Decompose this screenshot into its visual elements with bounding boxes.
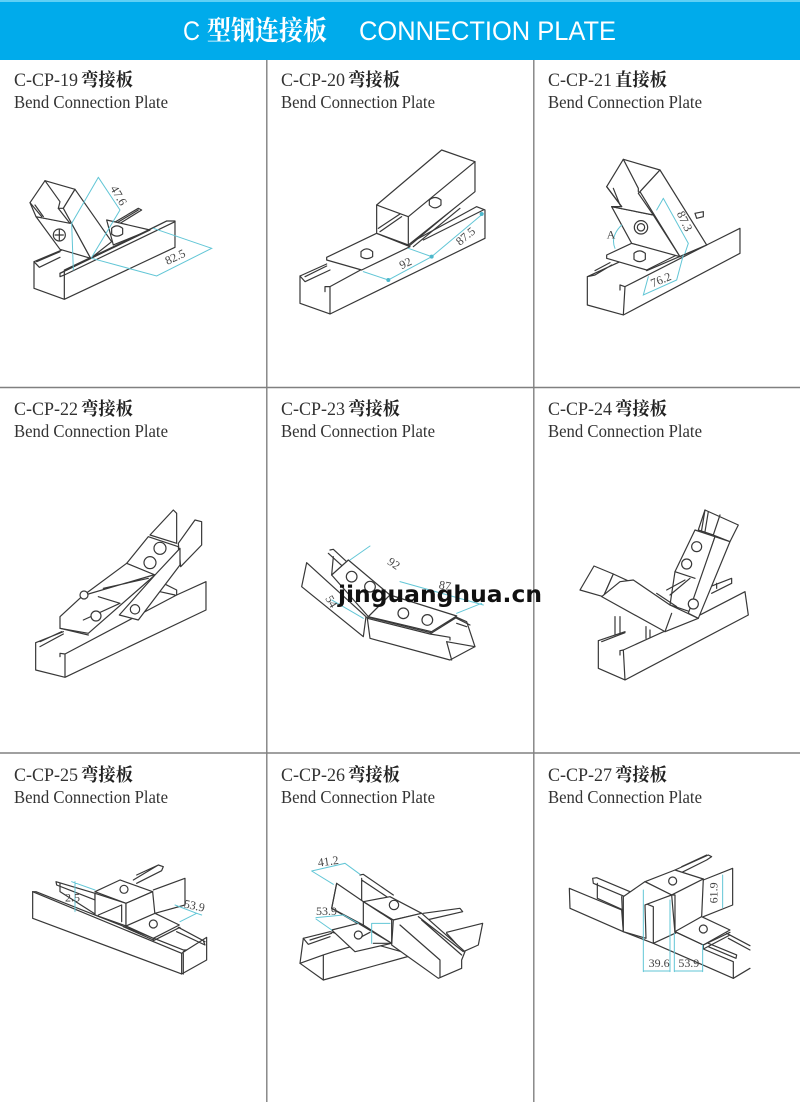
- diagram: C-CP-23: 54: [322, 593, 341, 610]
- panel: C-CP-22 label: C-CP-22: [14, 399, 78, 420]
- panel: C-CP-23 label: Bend Connection Plate: [281, 421, 435, 441]
- panel: C-CP-25 label: Bend Connection Plate: [14, 787, 168, 807]
- diagram: C-CP-27: 61.9: [707, 882, 721, 903]
- panel: C-CP-22 label: [14, 395, 168, 441]
- panel: C-CP-26 label: C-CP-26: [281, 765, 345, 786]
- diagram: C-CP-27: 39.6: [649, 956, 670, 970]
- diagram: C-CP-23: 87: [438, 577, 452, 593]
- panel: C-CP-25 label: 弯接板: [81, 761, 133, 787]
- panel: C-CP-27 label: C-CP-27: [548, 765, 612, 786]
- panel: C-CP-23 label: 弯接板: [348, 395, 400, 421]
- panel: C-CP-24 label: 弯接板: [615, 395, 667, 421]
- watermark: jinguanghua.cn: [337, 582, 542, 608]
- diagram: C-CP-20: 92: [397, 254, 414, 272]
- diagram: C-CP-26: 41.2: [317, 853, 340, 870]
- panel: C-CP-22 label: 弯接板: [81, 395, 133, 421]
- diagram: C-CP-22: [36, 510, 206, 677]
- panel: C-CP-25 label: C-CP-25: [14, 765, 78, 786]
- panel: C-CP-26 label: Bend Connection Plate: [281, 787, 435, 807]
- diagram: C-CP-21: A: [607, 227, 616, 241]
- panel: C-CP-20 label: Bend Connection Plate: [281, 92, 435, 112]
- diagram: C-CP-25: 53.9: [183, 897, 206, 915]
- diagram: C-CP-24: [580, 510, 748, 680]
- panel: C-CP-24 label: C-CP-24: [548, 399, 612, 420]
- banner title: CONNECTION PLATE: [359, 16, 616, 46]
- panel: C-CP-22 label: Bend Connection Plate: [14, 421, 168, 441]
- diagram: C-CP-19: 82.5: [163, 246, 188, 268]
- panel: C-CP-19 label: C-CP-19: [14, 70, 78, 91]
- panel: C-CP-23 label: [281, 395, 435, 441]
- diagram: C-CP-21: [587, 159, 740, 315]
- panel: C-CP-24 label: Bend Connection Plate: [548, 421, 702, 441]
- panel: C-CP-21 label: C-CP-21: [548, 70, 612, 91]
- diagram: C-CP-26: [300, 853, 483, 980]
- panel: C-CP-21 label: 直接板: [615, 66, 667, 92]
- diagram: C-CP-19: 47.6: [107, 183, 130, 208]
- panel: C-CP-24 label: [548, 395, 702, 441]
- panel: C-CP-21 label: [548, 66, 702, 112]
- banner title: [183, 9, 616, 48]
- header banner: [0, 0, 800, 60]
- diagram: C-CP-20: 87.5: [453, 224, 478, 248]
- panel: C-CP-20 label: [281, 66, 435, 112]
- panel: C-CP-21 label: Bend Connection Plate: [548, 92, 702, 112]
- panel: C-CP-19 label: 弯接板: [81, 66, 133, 92]
- diagram: C-CP-23: 92: [385, 554, 403, 573]
- panel: C-CP-19 label: Bend Connection Plate: [14, 92, 168, 112]
- panel: C-CP-27 label: 弯接板: [615, 761, 667, 787]
- banner title: 型钢连接板: [207, 9, 327, 48]
- diagram: C-CP-25: [33, 865, 207, 974]
- diagram: C-CP-21: 76.2: [649, 269, 673, 290]
- banner title: C: [183, 16, 200, 46]
- panel: C-CP-20 label: 弯接板: [348, 66, 400, 92]
- diagram: C-CP-19: [30, 177, 212, 299]
- diagram: C-CP-26: 53.9: [316, 904, 337, 918]
- panel: C-CP-26 label: 弯接板: [348, 761, 400, 787]
- panel: C-CP-19 label: [14, 66, 168, 112]
- diagram: C-CP-27: [569, 855, 750, 978]
- diagram: C-CP-20: [300, 150, 485, 314]
- diagram: C-CP-23: [302, 546, 483, 660]
- panel: C-CP-23 label: C-CP-23: [281, 399, 345, 420]
- diagram: C-CP-27: 53.9: [678, 956, 699, 970]
- panel: C-CP-26 label: [281, 761, 435, 807]
- panel: C-CP-25 label: [14, 761, 168, 807]
- panel: C-CP-27 label: Bend Connection Plate: [548, 787, 702, 807]
- panel: C-CP-27 label: [548, 761, 702, 807]
- diagram: C-CP-21: 87.3: [674, 209, 695, 234]
- diagram: C-CP-25: 2.5: [65, 891, 80, 905]
- panel: C-CP-20 label: C-CP-20: [281, 70, 345, 91]
